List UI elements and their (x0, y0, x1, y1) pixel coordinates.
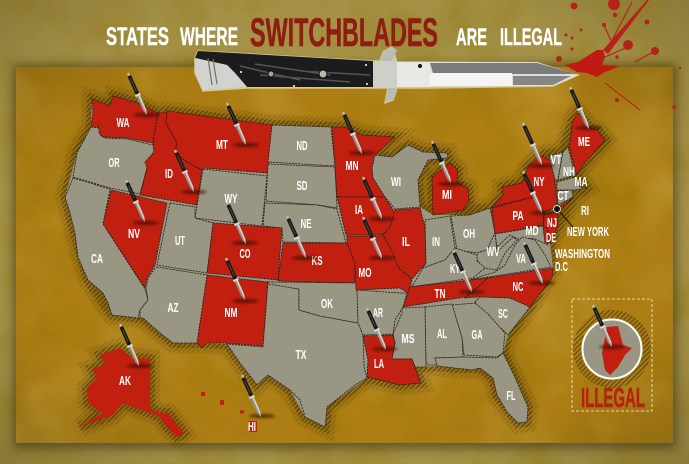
state: New Hampshire (558, 147, 575, 180)
state: Alabama (425, 304, 463, 365)
state: Pennsylvania: PA (512, 208, 524, 223)
state: Montana: MT (216, 137, 228, 152)
state: Maine: ME (578, 134, 590, 149)
knives stuck in illegal states (117, 72, 602, 418)
state: Louisiana: LA (374, 356, 384, 371)
state: Vermont (549, 152, 563, 180)
state: Minnesota: MN (346, 158, 358, 173)
state: New Mexico: NM (224, 305, 238, 320)
label: Washington D.C (555, 246, 610, 274)
map panel (13, 64, 677, 449)
state: Iowa (337, 197, 395, 235)
state: Illinois (383, 208, 426, 279)
state: Indiana: IN (432, 234, 440, 249)
state: Nebraska: NE (300, 216, 312, 231)
label: Washington D.C: WASHINGTON (555, 246, 610, 261)
state: Montana (166, 111, 272, 173)
state: Oregon: OR (108, 155, 120, 170)
state: Delaware: DE (546, 230, 556, 245)
knife: ID (172, 149, 207, 194)
knife: PA (520, 170, 556, 215)
state: Missouri: MO (358, 265, 372, 280)
state: Florida: FL (506, 388, 516, 403)
state: Iowa: IA (355, 202, 363, 217)
us map (65, 96, 605, 437)
state: Colorado (207, 223, 282, 280)
state: Oklahoma: OK (321, 296, 333, 311)
state: New Jersey and Long Island (543, 198, 573, 243)
knife: IA (360, 176, 395, 221)
state: Illinois: IL (402, 234, 410, 249)
state: Ohio (451, 208, 495, 253)
state: California: CA (91, 251, 103, 266)
state: Connecticut: CT (558, 188, 569, 203)
state: Delaware (543, 227, 556, 245)
state: Idaho: ID (165, 166, 173, 181)
state: South Carolina: SC (498, 306, 508, 321)
state: Nebraska (263, 203, 346, 243)
state: Hawaii: HI (248, 419, 256, 434)
state: South Carolina (475, 297, 530, 335)
state: Idaho (140, 112, 202, 205)
state: Ohio: OH (463, 226, 475, 241)
knife: MT (224, 102, 259, 147)
state: Indiana (423, 216, 455, 268)
state: Arkansas: AR (373, 305, 383, 320)
knife: MN (340, 111, 375, 155)
knife: MI (429, 140, 464, 186)
state: Wyoming: WY (224, 191, 238, 206)
state: Colorado: CO (240, 246, 250, 261)
state: Pennsylvania (492, 197, 544, 234)
state: California (65, 178, 148, 318)
state: Texas (227, 283, 367, 427)
label: Rhode Island: RI (581, 203, 589, 218)
state: West Virginia (477, 233, 517, 270)
knife: NC (521, 241, 555, 285)
legend icon: Maine (602, 326, 632, 375)
state: Virginia: VA (516, 251, 526, 266)
state: Mississippi (392, 307, 426, 367)
knife: MO (360, 216, 395, 260)
state: Maryland: MD (526, 223, 538, 238)
state: Washington (91, 96, 158, 143)
state: Michigan (432, 163, 469, 215)
state: Georgia (452, 303, 505, 357)
title: ARE (456, 24, 487, 51)
state: Minnesota (332, 127, 395, 197)
map shadow hatch (65, 96, 605, 437)
state: Kansas (278, 243, 355, 283)
state: Utah (157, 203, 213, 273)
state: Tennessee: TN (434, 286, 446, 301)
switchblade knife (195, 47, 578, 103)
state: North Carolina: NC (512, 279, 524, 294)
state: Missouri (347, 236, 412, 293)
state: Kentucky: KY (450, 261, 460, 276)
title (106, 11, 562, 55)
knife: NM (223, 257, 258, 303)
state: South Dakota (266, 164, 337, 208)
state: New Mexico (197, 275, 268, 348)
state: New York: NY (534, 174, 545, 189)
knife: TN (450, 249, 485, 294)
state: Kansas: KS (312, 253, 323, 268)
knife: LA (364, 307, 398, 351)
state: New Jersey and Long Island: NJ (547, 215, 557, 230)
state: Arizona (140, 267, 207, 343)
state: Alabama: AL (437, 326, 447, 341)
knife: CO (224, 201, 258, 245)
state: Wisconsin and upper Michigan (372, 145, 448, 209)
state: Alaska: AK (119, 373, 131, 388)
state: Nevada: NV (128, 226, 140, 241)
state: Kentucky (410, 248, 485, 287)
state: New York (492, 155, 557, 213)
state: Massachusetts: MA (574, 174, 588, 189)
knife: AK (117, 323, 153, 368)
state: Michigan: MI (442, 187, 452, 202)
state: Utah: UT (175, 233, 185, 248)
state: Arizona: AZ (168, 300, 179, 315)
state: Oklahoma (268, 282, 358, 323)
state: Maryland (495, 223, 548, 247)
knife: HI (239, 374, 275, 418)
knife outline glow (195, 47, 578, 103)
state: Wyoming (195, 169, 267, 226)
state: Tennessee (403, 278, 487, 307)
state: North Dakota (268, 125, 335, 166)
label: Washington D.C: D.C (555, 259, 568, 274)
state: Arkansas (357, 290, 407, 335)
state: Hawaii (201, 392, 257, 434)
blood splatter (556, 0, 681, 110)
title: STATES (106, 23, 169, 51)
state: Alaska (80, 348, 184, 437)
state: North Dakota: ND (296, 138, 308, 153)
label: New York: NEW YORK (567, 224, 609, 239)
knife: KS (284, 215, 318, 260)
new york marker (554, 206, 573, 227)
state: New Hampshire: NH (563, 164, 575, 179)
state: Louisiana (363, 335, 421, 385)
state: Washington: WA (116, 115, 130, 130)
knife: ME (567, 86, 602, 130)
state: Massachusetts (557, 174, 588, 190)
state: Florida (435, 353, 528, 423)
state: Nevada (103, 190, 167, 288)
state: Oregon (73, 127, 154, 194)
title: WHERE (180, 23, 238, 51)
state: Georgia: GA (472, 327, 483, 342)
state: Wisconsin and upper Michigan: WI (391, 174, 401, 189)
state: Maine (569, 113, 605, 175)
knife: WA (125, 72, 160, 117)
knife: NV (123, 179, 159, 225)
legend (572, 299, 652, 413)
state: Texas: TX (296, 347, 307, 362)
state: Mississippi: MS (402, 331, 415, 346)
title: ILLEGAL (500, 24, 562, 51)
state: Virginia (470, 237, 551, 280)
title: SWITCHBLADES (250, 11, 438, 55)
state: Vermont: VT (550, 152, 562, 167)
state: North Carolina (465, 268, 553, 307)
knife: NY (520, 122, 555, 168)
state: South Dakota: SD (296, 178, 308, 193)
state: West Virginia: WV (486, 244, 500, 259)
us land base (65, 96, 558, 427)
